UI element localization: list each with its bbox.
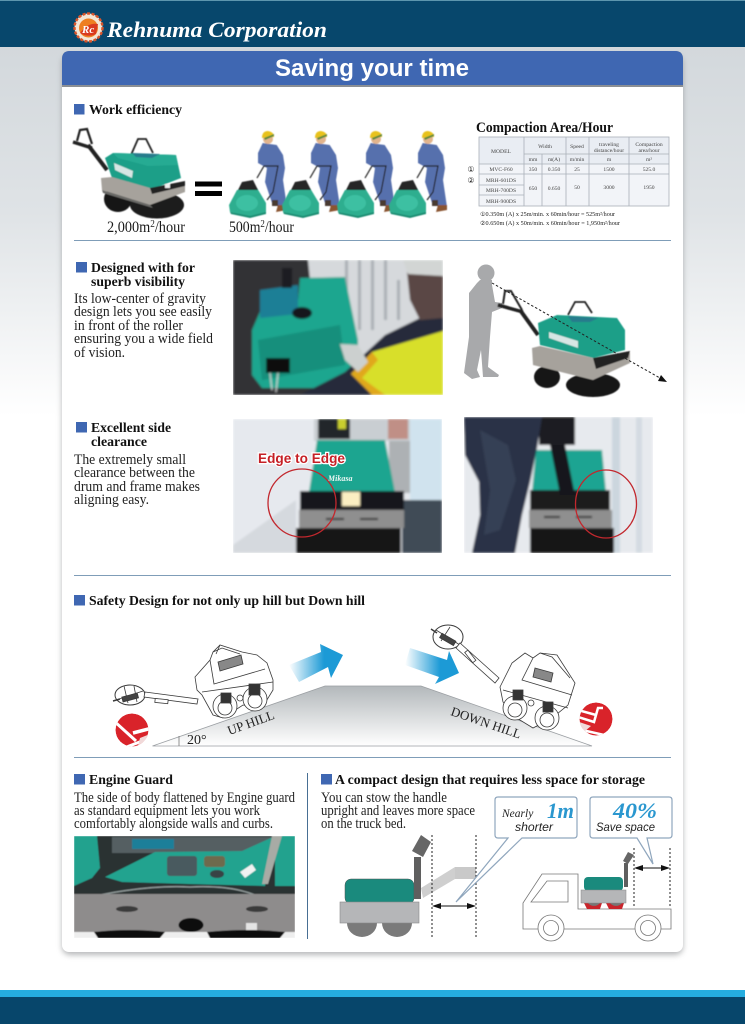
edge to edge label: Edge to Edge — [258, 451, 345, 466]
callout: nearly 1m shorter — [456, 797, 577, 902]
highlight circle — [576, 470, 636, 538]
compaction table: Width — [538, 144, 552, 150]
compaction table: m² — [646, 157, 652, 163]
angle mark — [178, 736, 180, 746]
compaction table: m — [607, 157, 612, 163]
formulas: ②0.650m (A) x 50m/min. x 60min/hour = 1,950m²/hour — [480, 220, 620, 227]
compaction table: m/min — [570, 157, 585, 163]
logo badge — [74, 14, 102, 42]
compaction table: mm — [529, 157, 538, 163]
text block: visibility: Designed with for — [91, 261, 195, 276]
slope diagram — [113, 625, 612, 748]
icon: red brake badge right — [578, 702, 612, 736]
callout: nearly 1m shorter: Nearly — [501, 808, 534, 820]
arrow: down — [405, 648, 459, 684]
callout: nearly 1m shorter: 1m — [547, 798, 574, 823]
compaction table: 25 — [574, 167, 580, 173]
compaction table: ① — [467, 165, 475, 174]
text block: visibility: of vision. — [74, 345, 125, 361]
compaction table: ② — [467, 176, 475, 185]
photo: roller rear, side clearance — [464, 417, 653, 553]
illustration: ride-behind roller — [73, 129, 185, 218]
compaction table: 525.0 — [643, 167, 655, 173]
text block: engine guard: The side of body flattened by Engine guard — [74, 790, 296, 806]
text block: visibility — [74, 261, 214, 361]
roller — [498, 291, 630, 397]
logo badge: Rc — [81, 24, 94, 36]
table heading: Compaction Area/Hour — [476, 120, 614, 136]
header band — [0, 0, 745, 47]
text block: compact design: on the truck bed. — [321, 816, 406, 832]
text block: side clearance: drum and frame makes — [74, 479, 200, 495]
text block: engine guard: Engine Guard — [89, 773, 173, 788]
arrow: up — [289, 644, 343, 682]
label: 500 per hour: /hour — [265, 219, 295, 236]
photo: roller front, edge to edge — [233, 419, 442, 553]
text block: side clearance: Excellent side — [91, 421, 171, 436]
line art: roller going up — [113, 645, 273, 718]
text block: side clearance: aligning easy. — [74, 492, 149, 508]
formulas — [480, 211, 620, 227]
text block: engine guard — [74, 773, 296, 832]
compaction table: 1950 — [643, 185, 655, 191]
compaction table: MVC-F60 — [489, 167, 513, 173]
text block: visibility: superb visibility — [91, 275, 185, 290]
arrow: handle gap — [432, 903, 476, 909]
operator silhouette — [464, 264, 502, 379]
down hill label: DOWN HILL — [449, 704, 523, 742]
angle label: 20° — [187, 733, 207, 748]
compaction table: traveling — [599, 142, 619, 148]
text block: compact design: You can stow the handle — [321, 790, 447, 806]
compaction table: Compaction — [635, 142, 663, 148]
page background — [0, 46, 745, 416]
compaction table: MRH-700DS — [486, 188, 516, 194]
title: Saving your time — [275, 55, 469, 82]
text block: side clearance: clearance — [91, 435, 147, 450]
line art: roller going down — [431, 625, 575, 730]
diagram: roller with stowed handle — [340, 835, 476, 937]
text block: side clearance — [74, 421, 200, 508]
text block: engine guard: as standard equipment lets you work — [74, 803, 261, 819]
compaction table: 0.350 — [548, 167, 560, 173]
up hill label: UP HILL — [225, 707, 276, 738]
footer band — [0, 990, 745, 1024]
compaction table — [467, 137, 669, 206]
callout: 40 percent save space: 40% — [612, 798, 657, 823]
callout: 40 percent save space: Save space — [596, 822, 655, 834]
heading: work efficiency: Work efficiency — [89, 103, 182, 118]
text block: visibility: design lets you see easily — [74, 304, 213, 320]
label: 500 per hour: 2 — [260, 219, 265, 230]
machine brand: Mikasa — [327, 474, 352, 483]
compaction table: area/hour — [638, 148, 660, 154]
company name: Rehnuma Corporation — [106, 17, 327, 42]
compaction table: MRH-900DS — [486, 199, 516, 205]
compaction table: 350 — [529, 167, 537, 173]
compaction table: 3000 — [603, 185, 615, 191]
hill — [152, 686, 592, 746]
text block: engine guard: comfortably alongside walls and curbs. — [74, 816, 273, 832]
main panel — [62, 55, 683, 955]
title bar — [62, 51, 683, 87]
text block: visibility: in front of the roller — [74, 318, 183, 334]
compaction table: 50 — [574, 185, 580, 191]
arrow: truck bed gap — [634, 865, 670, 871]
formulas: ①0.350m (A) x 25m/min. x 60min/hour = 525m²/hour — [480, 211, 615, 218]
photo: engine guard — [74, 836, 295, 938]
illustration: silhouette, roller and sight line — [464, 264, 667, 397]
compaction table: MODEL — [491, 149, 512, 155]
text block: side clearance: clearance between the — [74, 465, 195, 481]
heading: safety design: Safety Design for not only up hill but Down hill — [89, 594, 365, 609]
equals sign — [195, 182, 222, 196]
compaction table: Speed — [570, 144, 584, 150]
callout: nearly 1m shorter: shorter — [515, 822, 554, 834]
text block: compact design: upright and leaves more space — [321, 803, 475, 819]
compaction table: MRH-601DS — [486, 178, 516, 184]
compaction table: distance/hour — [594, 148, 624, 154]
diagram: truck with roller — [523, 848, 671, 941]
callout: 40 percent save space — [590, 797, 672, 864]
text block: visibility: Its low-center of gravity — [74, 291, 207, 307]
compaction table: m(A) — [548, 156, 560, 163]
text block: compact design: A compact design that requires less space for storage — [335, 773, 645, 788]
label: 2000 per hour: /hour — [155, 219, 186, 236]
label: 2000 per hour: 2,000m — [107, 219, 154, 236]
compaction table: 0.650 — [548, 186, 560, 192]
compaction table: 1500 — [603, 167, 615, 173]
compaction table: 650 — [529, 186, 537, 192]
label: 2000 per hour: 2 — [150, 219, 155, 230]
label: 500 per hour: 500m — [229, 219, 264, 236]
illustration: four workers with plate compactors — [229, 131, 447, 218]
icon: red brake badge left — [116, 714, 148, 746]
sight line arrow — [492, 283, 667, 382]
photo: operator view over roller — [233, 260, 443, 395]
text block: compact design — [321, 773, 645, 832]
highlight circle — [268, 469, 336, 537]
text block: visibility: ensuring you a wide field — [74, 331, 214, 347]
text block: side clearance: The extremely small — [74, 452, 186, 468]
